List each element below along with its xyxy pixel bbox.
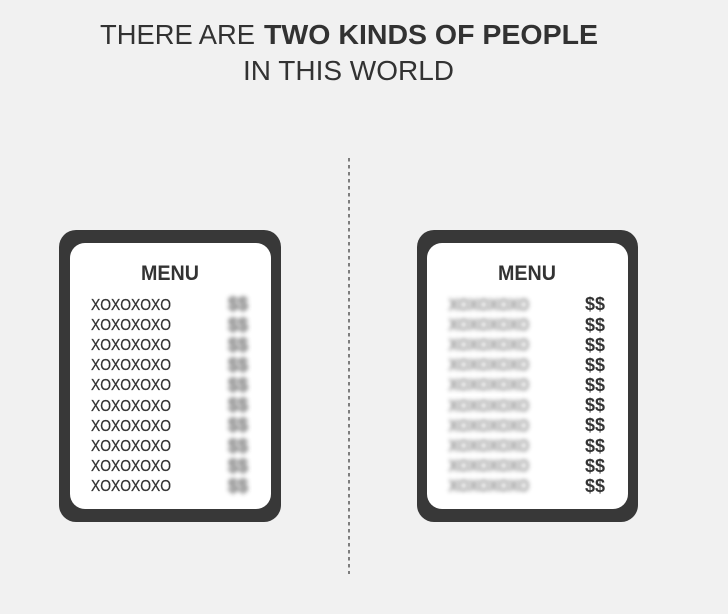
left menu blurred prices: $$ (228, 415, 248, 435)
right menu heading: MENU (498, 262, 556, 285)
right menu blurred items: XOXOXOXO (449, 438, 529, 455)
dashed divider (348, 158, 350, 574)
left menu frame (59, 230, 281, 522)
left menu items in sharp text: XOXOXOXO (91, 418, 171, 435)
left menu blurred prices: $$ (228, 436, 248, 456)
right menu sharp prices: $$ (585, 436, 605, 456)
left menu blurred prices: $$ (228, 315, 248, 335)
left menu items in sharp text: XOXOXOXO (91, 377, 171, 394)
right menu sharp prices: $$ (585, 375, 605, 395)
left menu blurred prices: $$ (228, 355, 248, 375)
right menu blurred items: XOXOXOXO (449, 317, 529, 334)
title (100, 19, 598, 86)
right menu blurred items: XOXOXOXO (449, 418, 529, 435)
right menu blurred items: XOXOXOXO (449, 458, 529, 475)
left menu items in sharp text: XOXOXOXO (91, 438, 171, 455)
left menu items in sharp text: XOXOXOXO (91, 357, 171, 374)
left menu items in sharp text (91, 297, 171, 495)
right menu blurred items: XOXOXOXO (449, 377, 529, 394)
right menu sharp prices: $$ (585, 415, 605, 435)
right menu blurred items: XOXOXOXO (449, 398, 529, 415)
left menu items in sharp text: XOXOXOXO (91, 478, 171, 495)
right menu blurred items: XOXOXOXO (449, 337, 529, 354)
right menu sharp prices (585, 294, 605, 496)
left menu blurred prices: $$ (228, 375, 248, 395)
left menu heading: MENU (141, 262, 199, 285)
panel: right menu, blurred items (417, 230, 638, 522)
right menu blurred items: XOXOXOXO (449, 357, 529, 374)
right menu blurred items (449, 297, 529, 495)
left menu blurred prices: $$ (228, 294, 248, 314)
right menu paper (427, 243, 628, 509)
title: IN THIS WORLD (243, 55, 454, 86)
left menu blurred prices: $$ (228, 456, 248, 476)
right menu blurred items: XOXOXOXO (449, 297, 529, 314)
left menu blurred prices: $$ (228, 395, 248, 415)
right menu sharp prices: $$ (585, 315, 605, 335)
right menu sharp prices: $$ (585, 335, 605, 355)
right menu sharp prices: $$ (585, 355, 605, 375)
panel: left menu, blurred prices (59, 230, 281, 522)
right menu sharp prices: $$ (585, 294, 605, 314)
left menu items in sharp text: XOXOXOXO (91, 458, 171, 475)
left menu items in sharp text: XOXOXOXO (91, 317, 171, 334)
left menu blurred prices (228, 294, 248, 496)
left menu items in sharp text: XOXOXOXO (91, 297, 171, 314)
right menu blurred items: XOXOXOXO (449, 478, 529, 495)
right menu sharp prices: $$ (585, 395, 605, 415)
title: TWO KINDS OF PEOPLE (264, 19, 598, 50)
left menu blurred prices: $$ (228, 476, 248, 496)
right menu sharp prices: $$ (585, 476, 605, 496)
title: THERE ARE (100, 19, 255, 50)
left menu paper (70, 243, 271, 509)
right menu frame (417, 230, 638, 522)
left menu items in sharp text: XOXOXOXO (91, 398, 171, 415)
left menu blurred prices: $$ (228, 335, 248, 355)
right menu sharp prices: $$ (585, 456, 605, 476)
left menu items in sharp text: XOXOXOXO (91, 337, 171, 354)
